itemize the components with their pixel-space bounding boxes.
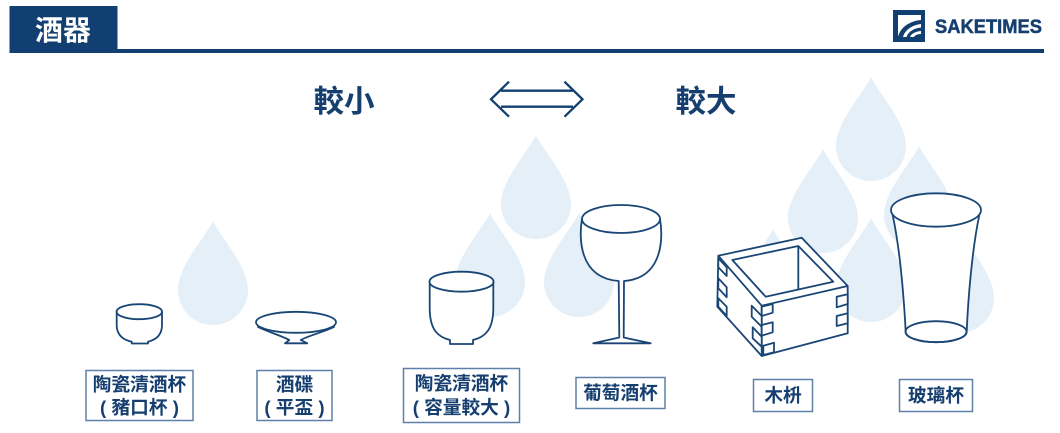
- icon: wine glass: [581, 205, 661, 343]
- caption: large ceramic cup: 陶瓷清酒杯: [415, 373, 509, 394]
- double-headed arrow: [491, 82, 582, 117]
- logo: SAKETIMES: [893, 10, 1042, 42]
- caption: wine glass: [576, 378, 665, 408]
- caption: masu: [754, 380, 812, 412]
- caption: flat sake dish: [257, 370, 332, 420]
- caption: glass: 玻璃杯: [908, 385, 964, 406]
- section tab: [10, 6, 118, 53]
- caption: small ceramic cup: 陶瓷清酒杯: [93, 374, 187, 395]
- caption: masu: 木枡: [764, 385, 802, 406]
- caption: small ceramic cup: [86, 370, 193, 420]
- caption: small ceramic cup: ( 豬口杯 ): [100, 397, 179, 418]
- label: larger: 較大: [676, 85, 736, 119]
- caption: large ceramic cup: [404, 368, 520, 422]
- icon: drinking glass: [891, 193, 981, 342]
- caption: large ceramic cup: ( 容量較大 ): [413, 397, 510, 418]
- icon: small ceramic cup: [117, 304, 162, 344]
- icon: wooden masu box: [717, 238, 848, 356]
- caption: wine glass: 葡萄酒杯: [583, 382, 658, 404]
- section tab: 酒器: [35, 15, 91, 46]
- caption: glass: [900, 380, 972, 412]
- header bar: [10, 6, 1044, 53]
- caption: flat sake dish: 酒碟: [276, 374, 314, 395]
- label: smaller: 較小: [314, 85, 375, 119]
- icon: large ceramic cup: [430, 272, 494, 344]
- background water drops: [178, 77, 994, 333]
- caption: flat sake dish: ( 平盃 ): [264, 397, 325, 418]
- logo: SAKETIMES: SAKETIMES: [935, 16, 1042, 38]
- icon: flat sake dish: [256, 312, 336, 343]
